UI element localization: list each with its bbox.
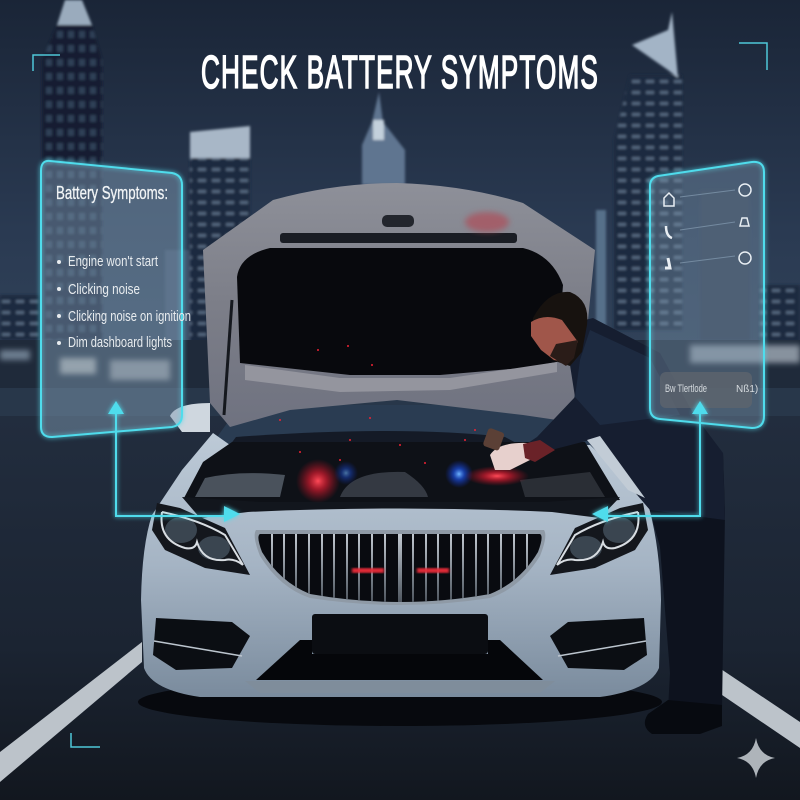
left symptoms panel (41, 161, 191, 437)
car body (141, 433, 661, 697)
windshield (190, 405, 615, 475)
hood strut (280, 233, 517, 243)
license plate (312, 614, 488, 654)
handheld tester (482, 428, 505, 451)
panel status bar (660, 372, 752, 408)
red and blue sparks (279, 345, 529, 503)
right icon panel: Bw Tlertlode (665, 383, 707, 395)
hood underside (237, 248, 563, 375)
gloved hand (490, 443, 530, 470)
right icon panel (650, 162, 764, 428)
cowl band (182, 497, 620, 518)
hood red reflection (465, 212, 509, 232)
raised hood (203, 183, 595, 427)
fog vents (153, 618, 250, 670)
lower bumper lip (245, 681, 555, 693)
left headlight (152, 503, 250, 575)
torso and arm (525, 318, 725, 520)
panel icons (664, 184, 751, 268)
symptom list (57, 254, 191, 351)
left connector arrow (108, 401, 240, 522)
legs (640, 453, 725, 710)
symptom list: Engine won't start (68, 254, 158, 270)
symptom list: Dim dashboard lights (68, 335, 172, 351)
right connector arrow (592, 401, 708, 522)
cuff (523, 440, 555, 462)
symptom list: Clicking noise on ignition (68, 309, 191, 325)
hood lower ribbing (245, 362, 557, 392)
car with raised hood (141, 183, 661, 697)
grille red glow (352, 568, 449, 573)
white fender edge (587, 436, 645, 498)
right headlight (550, 503, 648, 575)
engine bay (184, 442, 620, 505)
grille (255, 530, 545, 605)
lower intake (256, 640, 543, 680)
right icon panel: Nß1) (736, 384, 758, 395)
head (532, 292, 587, 366)
symptom list: Clicking noise (68, 282, 140, 298)
sparkle mark (737, 738, 775, 778)
side mirror (170, 403, 210, 432)
car shadow (138, 678, 662, 726)
boots (645, 700, 722, 734)
panel heading: Battery Symptoms: (56, 183, 168, 203)
mechanic (482, 292, 725, 734)
